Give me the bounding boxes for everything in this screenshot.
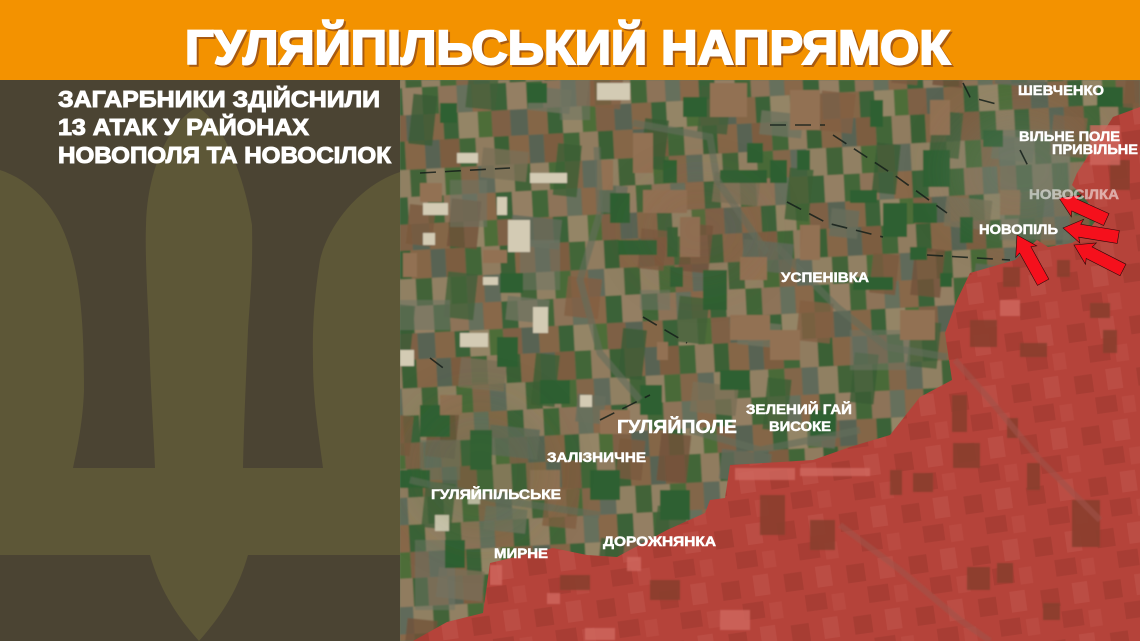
map: ravines and rivers	[420, 83, 1030, 420]
text block: attacks summary: 13 АТАК У РАЙОНАХ	[58, 113, 310, 140]
arrow: Novopil east	[1062, 218, 1120, 244]
title: ГУЛЯЙПІЛЬСЬКИЙ НАПРЯМОК	[185, 20, 951, 75]
map labels: ДОРОЖНЯНКА	[603, 533, 716, 549]
arrow: Novosilka north	[1058, 194, 1110, 226]
map: broad tone	[410, 110, 1090, 540]
map labels: ЗАЛІЗНИЧНЕ	[547, 449, 646, 465]
map labels: ЗЕЛЕНИЙ ГАЙ	[746, 400, 852, 417]
map labels	[431, 82, 1138, 561]
text block: attacks summary: ЗАГАРБНИКИ ЗДІЙСНИЛИ	[58, 85, 380, 112]
map labels: ПРИВІЛЬНЕ	[1052, 141, 1138, 157]
panel: satellite map	[400, 80, 1140, 641]
map labels: МИРНЕ	[494, 545, 548, 561]
map labels: ВИСОКЕ	[769, 418, 831, 434]
map labels: ШЕВЧЕНКО	[1018, 82, 1104, 98]
arrow: southeast	[1074, 242, 1126, 276]
header banner	[0, 0, 1140, 80]
title: ГУЛЯЙПІЛЬСЬКИЙ НАПРЯМОК	[187, 22, 953, 77]
map: farmland fields	[400, 80, 1140, 641]
map: valley corridors	[410, 123, 947, 515]
arrow: Novopil south	[1015, 234, 1050, 286]
map labels: ГУЛЯЙПІЛЬСЬКЕ	[431, 485, 561, 502]
icon: trident watermark	[0, 107, 400, 641]
map: occupied territory	[413, 107, 1140, 641]
text block: attacks summary	[58, 85, 392, 168]
map labels: ГУЛЯЙПОЛЕ	[617, 416, 737, 437]
left panel background	[0, 80, 400, 641]
map labels: УСПЕНІВКА	[781, 269, 869, 285]
map: darkening wash	[400, 80, 1140, 641]
map labels: НОВОПІЛЬ	[979, 221, 1058, 237]
map labels: НОВОСІЛКА	[1029, 186, 1119, 202]
text block: attacks summary: НОВОПОЛЯ ТА НОВОСІЛОК	[58, 142, 392, 168]
map labels: ВІЛЬНЕ ПОЛЕ	[1019, 128, 1120, 144]
